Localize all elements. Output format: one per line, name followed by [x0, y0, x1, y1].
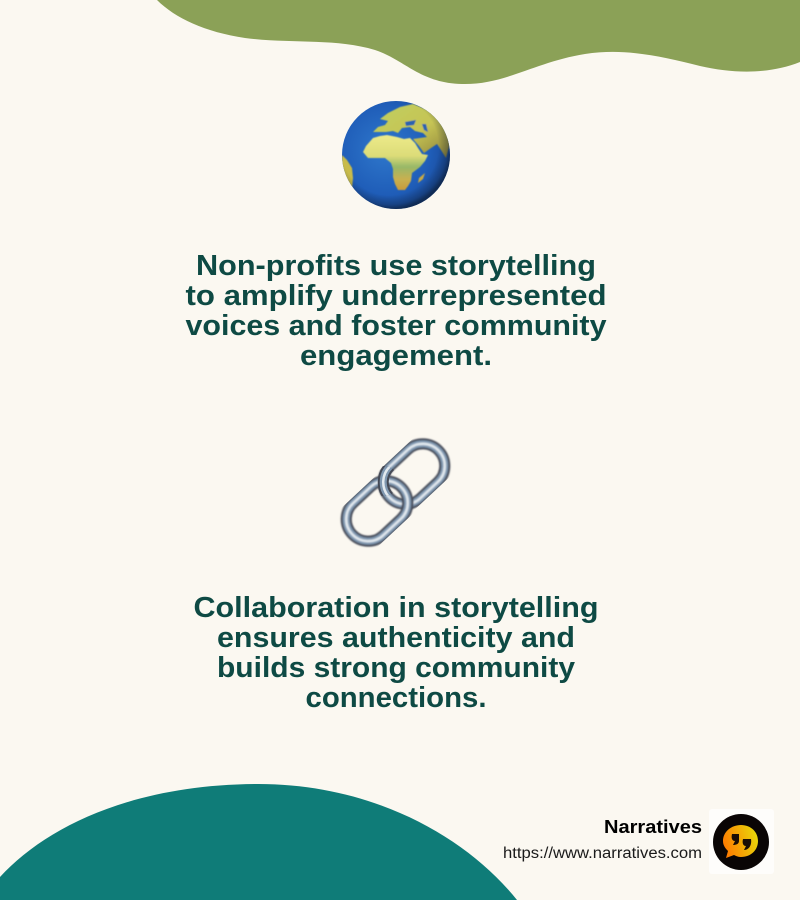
decorative teal hill	[0, 784, 517, 900]
heading: collaboration statement: Collaboration in storytelling	[194, 592, 598, 624]
icon detail: Eurasia	[373, 104, 450, 158]
icon detail: upper link	[374, 435, 454, 513]
heading: non-profits statement: Non-profits use storytelling	[196, 250, 596, 282]
heading: non-profits statement: voices and foster community	[186, 310, 606, 342]
icon detail: lower link	[337, 472, 417, 550]
logo quotes	[732, 834, 751, 850]
logo	[709, 809, 774, 874]
icon detail: Caspian and Black seas	[405, 120, 428, 132]
icon detail: Africa	[363, 135, 428, 190]
heading: collaboration statement: connections.	[306, 682, 486, 714]
decorative green wave	[157, 0, 800, 84]
icon detail: Madagascar	[418, 173, 425, 183]
icon: chain link	[337, 435, 454, 550]
heading: non-profits statement: to amplify underrepresented	[186, 280, 606, 312]
logo speech bubble	[723, 825, 758, 858]
icon detail: link overlap	[378, 466, 394, 496]
icon detail: South America	[342, 155, 353, 188]
icon detail: globe shading	[342, 101, 450, 209]
heading: non-profits statement	[186, 250, 606, 372]
heading: non-profits statement: engagement.	[300, 340, 492, 372]
heading: collaboration statement	[194, 592, 598, 714]
brand name: Narratives	[604, 817, 702, 837]
heading: collaboration statement: ensures authenticity and	[217, 622, 575, 654]
brand url: https://www.narratives.com	[503, 845, 702, 862]
heading: collaboration statement: builds strong community	[217, 652, 575, 684]
icon: globe	[342, 101, 450, 209]
